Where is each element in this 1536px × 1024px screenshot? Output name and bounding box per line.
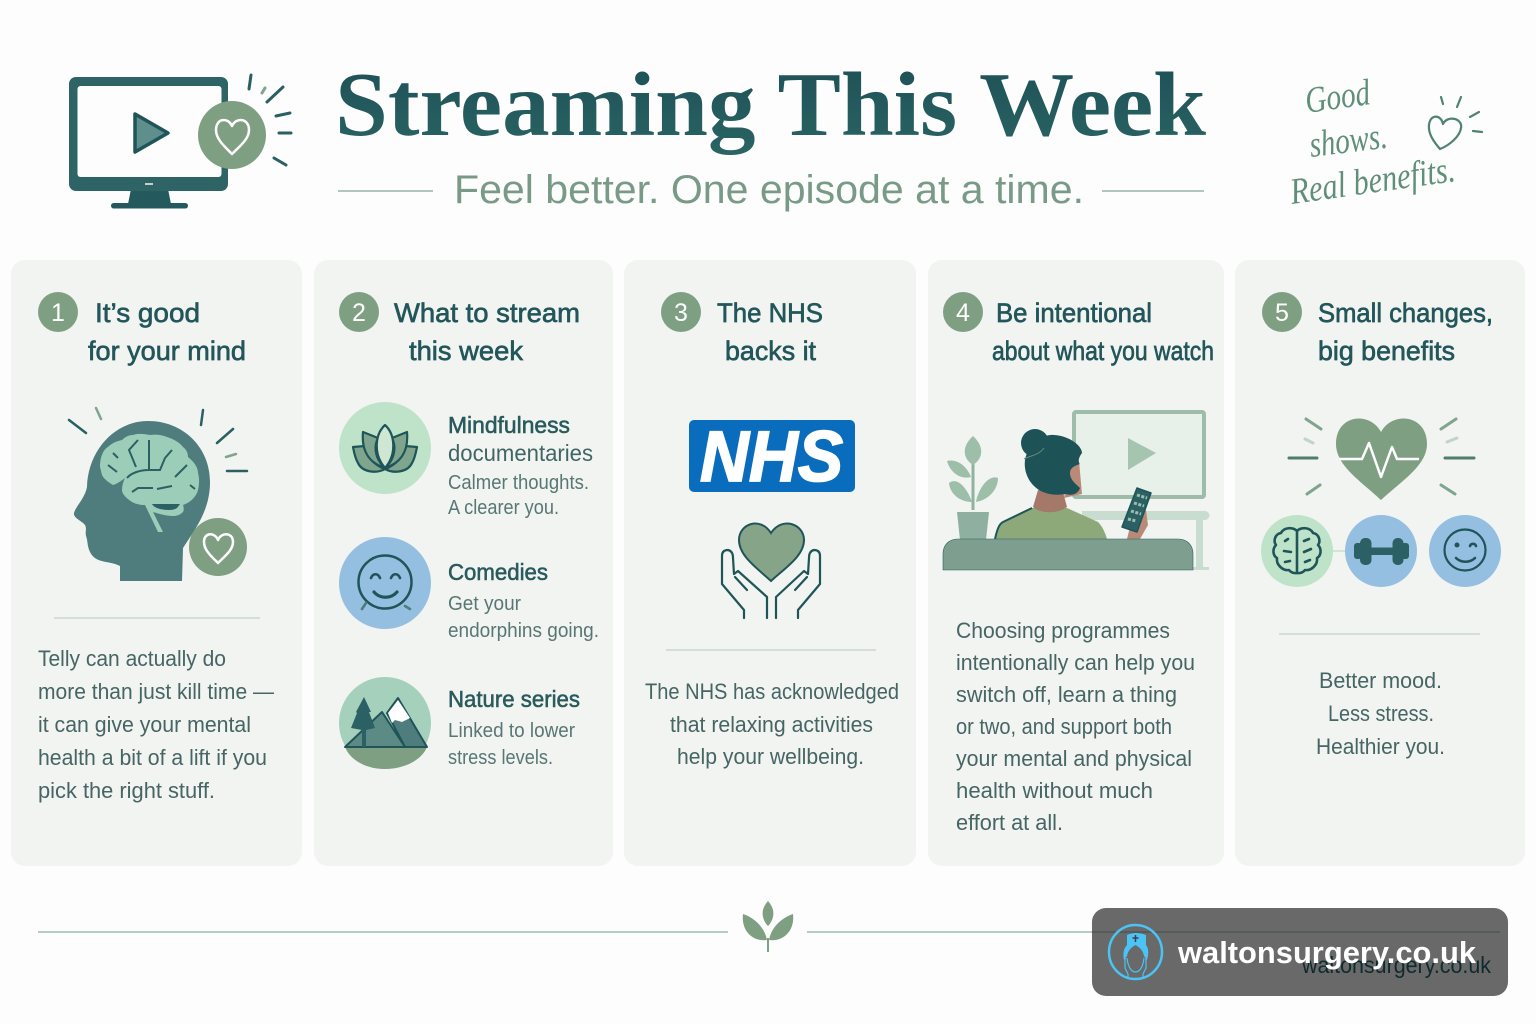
body text: Better mood. bbox=[1319, 668, 1442, 693]
body text: Healthier you. bbox=[1316, 734, 1445, 759]
body text: help your wellbeing. bbox=[677, 744, 864, 769]
handwritten note: Good bbox=[1303, 72, 1373, 122]
icon: hands holding heart bbox=[722, 524, 820, 618]
nature series: Linked to lower bbox=[448, 720, 575, 742]
body text: intentionally can help you bbox=[956, 650, 1195, 675]
heading bbox=[339, 292, 580, 366]
icon: brain circle bbox=[1261, 515, 1350, 587]
body text: or two, and support both bbox=[956, 714, 1172, 739]
panel: what to stream this week bbox=[314, 260, 613, 866]
heading: for your mind bbox=[88, 336, 246, 366]
comedies: Get your bbox=[448, 593, 521, 615]
heading bbox=[661, 292, 823, 366]
heading: 3 bbox=[674, 299, 688, 327]
body text: Telly can actually do bbox=[38, 646, 226, 671]
mindfulness documentaries: Calmer thoughts. bbox=[448, 472, 589, 494]
title: Streaming This Week bbox=[335, 54, 1206, 155]
nature series: Nature series bbox=[448, 686, 580, 712]
heading: Be intentional bbox=[996, 298, 1152, 328]
heading: The NHS bbox=[717, 298, 823, 328]
body text: pick the right stuff. bbox=[38, 778, 215, 803]
panel: it's good for your mind bbox=[11, 260, 302, 866]
heading bbox=[943, 292, 1214, 366]
comedies: endorphins going. bbox=[448, 620, 599, 642]
body text bbox=[38, 646, 274, 803]
body text: health without much bbox=[956, 778, 1153, 803]
icon: nurse logo bbox=[1109, 925, 1162, 979]
icon: dumbbell circle bbox=[1345, 515, 1417, 587]
body text: your mental and physical bbox=[956, 746, 1192, 771]
mindfulness documentaries: Mindfulness bbox=[448, 412, 570, 438]
heading: It’s good bbox=[95, 298, 200, 328]
heading bbox=[1262, 292, 1493, 366]
heading bbox=[38, 292, 246, 366]
website badge: waltonsurgery.co.uk bbox=[1301, 952, 1491, 978]
body text bbox=[1316, 668, 1445, 759]
nature series: stress levels. bbox=[448, 747, 553, 769]
body text bbox=[956, 618, 1195, 835]
panel: the NHS backs it bbox=[624, 260, 916, 866]
icon: heart with pulse bbox=[1289, 418, 1474, 500]
body text: The NHS has acknowledged bbox=[645, 679, 899, 704]
illustration: person watching TV bbox=[943, 412, 1210, 570]
heading: big benefits bbox=[1318, 336, 1455, 366]
heading: backs it bbox=[725, 336, 816, 366]
body text: effort at all. bbox=[956, 810, 1063, 835]
mindfulness documentaries: A clearer you. bbox=[448, 497, 559, 519]
icon: nature mountains bbox=[339, 677, 431, 769]
mindfulness documentaries bbox=[448, 412, 593, 519]
mindfulness documentaries: documentaries bbox=[448, 440, 593, 466]
comedies bbox=[448, 559, 599, 642]
icon: smiley circle bbox=[1429, 515, 1501, 587]
NHS logo: NHS bbox=[700, 418, 843, 497]
subtitle: Feel better. One episode at a time. bbox=[454, 168, 1084, 212]
handwritten note: shows. bbox=[1307, 116, 1390, 166]
comedies: Comedies bbox=[448, 559, 548, 585]
body text: health a bit of a lift if you bbox=[38, 745, 267, 770]
body text: more than just kill time — bbox=[38, 679, 274, 704]
heading: 2 bbox=[352, 299, 366, 327]
panel: be intentional bbox=[928, 260, 1224, 866]
body text bbox=[645, 679, 899, 769]
footer divider with leaf bbox=[38, 901, 1500, 952]
icon: smiley bbox=[339, 537, 431, 629]
icon: lotus bbox=[339, 402, 431, 494]
heading: 4 bbox=[956, 299, 970, 327]
icon: monitor with play button and heart bbox=[69, 75, 291, 208]
heading: Small changes, bbox=[1318, 298, 1493, 328]
nature series bbox=[448, 686, 580, 769]
heading: 5 bbox=[1275, 299, 1289, 327]
panel: small changes, big benefits bbox=[1235, 260, 1525, 866]
body text: Choosing programmes bbox=[956, 618, 1170, 643]
handwritten note bbox=[1287, 72, 1482, 213]
website badge: waltonsurgery.co.uk bbox=[1177, 935, 1477, 970]
website badge bbox=[1092, 908, 1508, 996]
icon: head with brain bbox=[69, 408, 247, 581]
body text: Less stress. bbox=[1328, 701, 1434, 726]
heading: about what you watch bbox=[992, 336, 1214, 366]
heading: What to stream bbox=[394, 298, 580, 328]
body text: it can give your mental bbox=[38, 712, 251, 737]
body text: that relaxing activities bbox=[670, 712, 873, 737]
handwritten note: Real benefits. bbox=[1287, 149, 1458, 213]
heading: this week bbox=[409, 336, 523, 366]
body text: switch off, learn a thing bbox=[956, 682, 1177, 707]
heading: 1 bbox=[51, 299, 65, 327]
